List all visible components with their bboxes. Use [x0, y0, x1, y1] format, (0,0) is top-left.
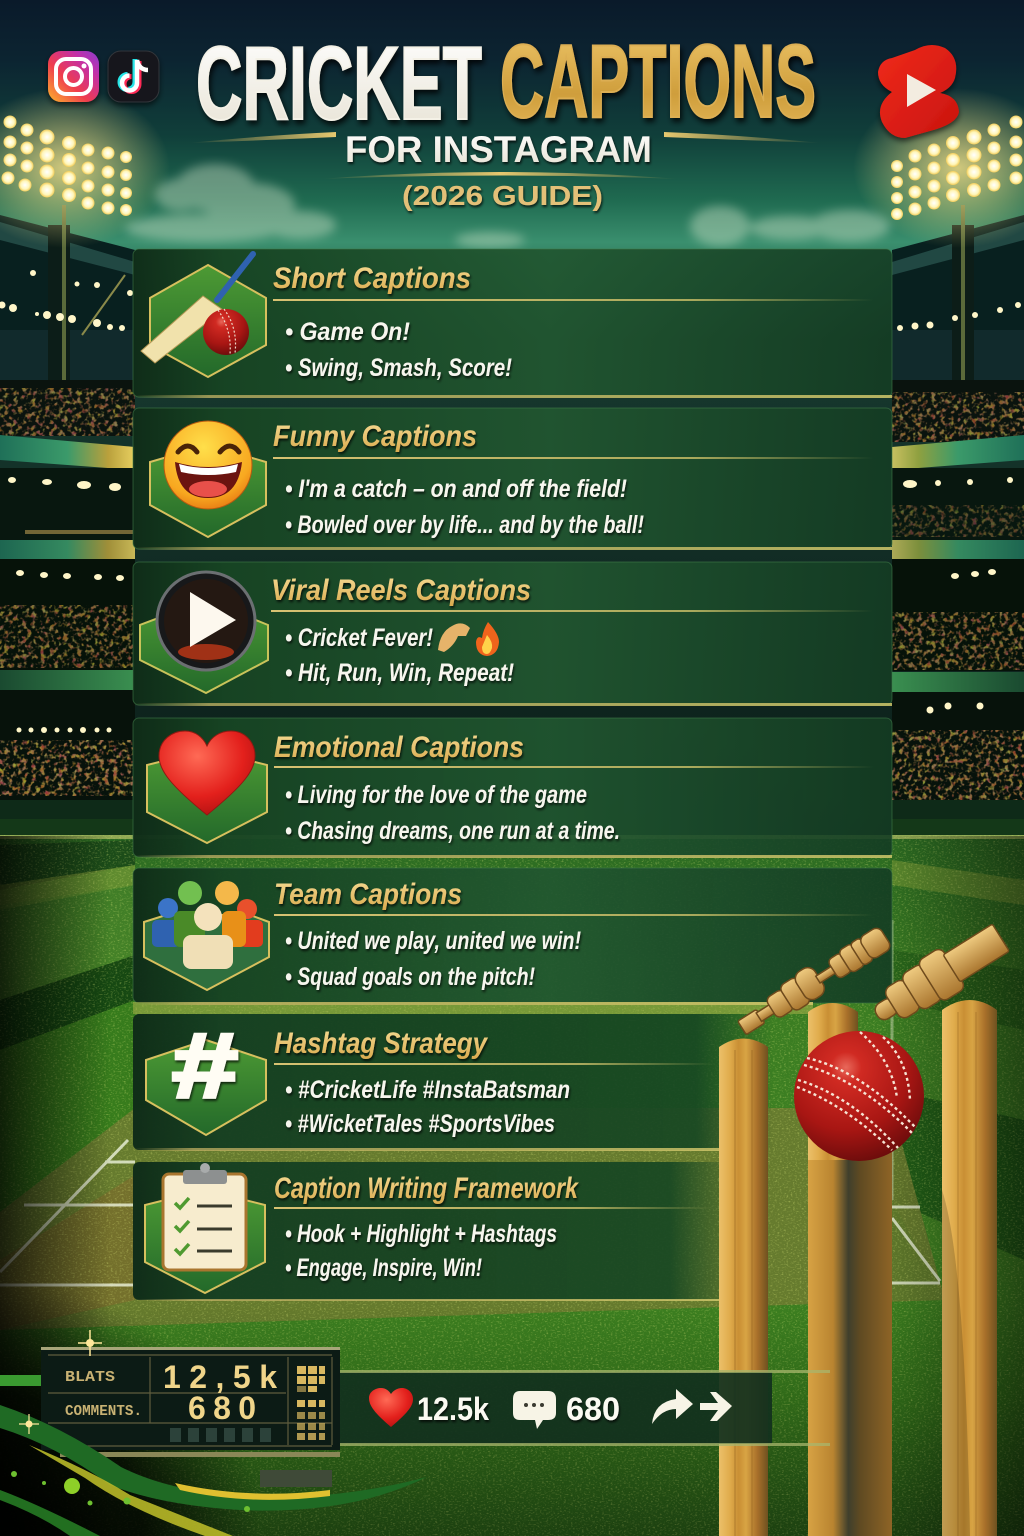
engagement bar [340, 1370, 830, 1446]
icon: comment bubble [513, 1391, 556, 1429]
icon: heart like [369, 1388, 413, 1427]
pitch [0, 1108, 945, 1330]
caption list: • Bowled over by life... and by the ball! [285, 511, 644, 539]
panel: hashtag strategy [133, 1014, 773, 1151]
icon: hash symbol [146, 1015, 266, 1135]
panel: caption writing framework [133, 1162, 743, 1301]
string lights [0, 270, 1021, 733]
likes count: 12.5k [417, 1391, 489, 1427]
caption list: • Chasing dreams, one run at a time. [285, 817, 620, 845]
ball [794, 1031, 924, 1161]
stadium stands left [0, 205, 135, 836]
heading: Viral Reels Captions [271, 574, 531, 607]
subtitle: 2026 guide: (2026 GUIDE) [402, 180, 603, 211]
stump: middle [808, 1003, 892, 1536]
scoreboard grids [297, 1366, 325, 1440]
scoreboard [0, 1347, 340, 1487]
caption list [285, 624, 514, 687]
caption list: • Cricket Fever! [285, 624, 433, 652]
clouds [125, 164, 890, 248]
stadium stands right [892, 205, 1024, 836]
mowing stripes left [0, 840, 135, 890]
caption list [285, 318, 512, 382]
scoreboard labels: COMMENTS. [65, 1403, 142, 1420]
icon: play button [140, 572, 268, 693]
caption list: • United we play, united we win! [285, 927, 581, 955]
scoreboard numbers [163, 1359, 277, 1426]
icon: clipboard checklist [145, 1163, 265, 1293]
caption list: • I'm a catch – on and off the field! [285, 475, 627, 503]
icon: floodlight right [853, 88, 1024, 248]
caption list: • Living for the love of the game [285, 781, 587, 809]
decorative swoosh and sparkles [0, 1330, 427, 1536]
panel: viral reels captions [133, 562, 892, 706]
scoreboard numbers: 680 [188, 1390, 256, 1426]
cricket field [0, 835, 1024, 1536]
caption list: • Hit, Run, Win, Repeat! [285, 659, 514, 687]
scoreboard numbers: 12,5k [163, 1359, 277, 1395]
stump: left [719, 1038, 768, 1536]
caption list [285, 1076, 570, 1138]
caption list [285, 475, 644, 539]
background: sky and stadium [0, 0, 1024, 850]
caption list [285, 927, 581, 991]
icon: team [144, 881, 269, 990]
stump: right [942, 1000, 997, 1536]
caption list: • #CricketLife #InstaBatsman [285, 1076, 570, 1104]
icon: floodlight left [0, 88, 170, 248]
caption list [285, 1220, 557, 1282]
heading: Caption Writing Framework [274, 1172, 579, 1205]
icon: heart [147, 731, 267, 843]
icon: cheering hand and flame [438, 622, 499, 656]
panel: short captions [133, 249, 892, 398]
heading: Hashtag Strategy [274, 1027, 488, 1060]
heading: Emotional Captions [274, 731, 524, 764]
icon: instagram [48, 51, 99, 102]
heading: Funny Captions [273, 420, 477, 453]
wicket stumps and ball [719, 917, 1014, 1536]
caption list: • Swing, Smash, Score! [285, 354, 512, 382]
title: CRICKET [196, 26, 482, 142]
bail: right [864, 917, 1014, 1035]
icon: bat and ball [141, 254, 266, 377]
icon: forward arrow [700, 1392, 732, 1421]
panel: emotional captions [133, 718, 892, 858]
panel: funny captions [133, 408, 892, 550]
heading: Short Captions [273, 262, 471, 295]
caption list: • Squad goals on the pitch! [285, 963, 535, 991]
icon: laughing emoji [150, 421, 266, 537]
icon: share arrow [652, 1389, 693, 1424]
caption list: • Engage, Inspire, Win! [285, 1254, 482, 1282]
caption list: • #WicketTales #SportsVibes [285, 1110, 555, 1138]
bail: left [733, 922, 893, 1041]
scoreboard labels [65, 1369, 142, 1420]
scoreboard labels: BLATS [65, 1369, 115, 1386]
icon: tiktok [108, 51, 159, 102]
subtitle: for instagram [188, 129, 822, 179]
icon: youtube shorts [878, 45, 959, 138]
subtitle: for instagram: FOR INSTAGRAM [345, 129, 652, 170]
panel: team captions [133, 868, 892, 1014]
icon: hash symbol: # [172, 1015, 238, 1117]
title: CAPTIONS [500, 24, 816, 140]
caption list: • Game On! [285, 318, 410, 346]
comments count: 680 [566, 1391, 620, 1427]
comment dots [524, 1403, 544, 1407]
caption list: • Hook + Highlight + Hashtags [285, 1220, 557, 1248]
mowing stripes right [892, 860, 1024, 905]
caption list [285, 781, 620, 845]
heading: Team Captions [274, 878, 462, 911]
